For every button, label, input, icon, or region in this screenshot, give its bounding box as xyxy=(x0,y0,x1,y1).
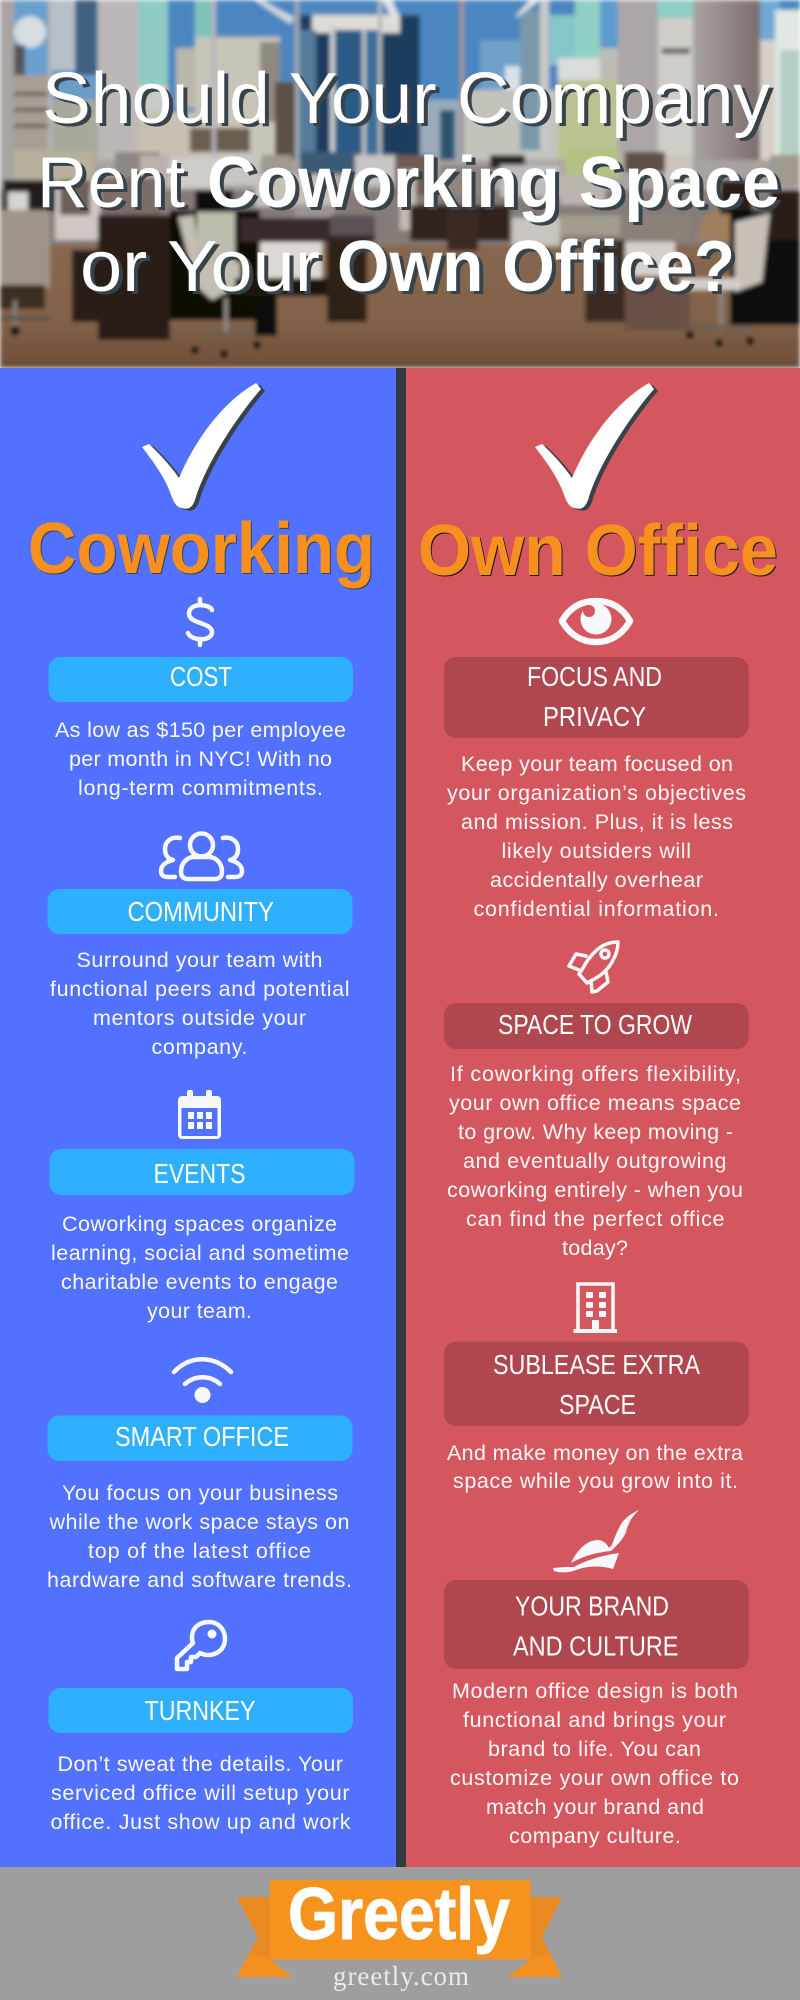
card: space to grow xyxy=(444,1003,748,1260)
text: brand description: Modern office design is both xyxy=(452,1679,738,1703)
icon: feathered hat xyxy=(553,1510,639,1572)
text: cost description: As low as $150 per employee xyxy=(55,718,346,742)
title: Rent xyxy=(37,143,185,223)
card: events xyxy=(50,1149,354,1323)
text: space to grow description xyxy=(447,1062,743,1260)
text: events description: learning, social and sometime xyxy=(51,1241,349,1265)
heading: Own Office: Own Office xyxy=(418,511,778,591)
pill: turnkey: TURNKEY xyxy=(144,1695,256,1726)
text: space to grow description: your own office means space xyxy=(449,1091,741,1115)
icon: eye xyxy=(562,601,630,642)
text: space to grow description: and eventually outgrowing xyxy=(463,1149,726,1173)
icon: dollar sign xyxy=(188,599,212,645)
pill: community: COMMUNITY xyxy=(128,896,274,927)
text: brand description: customize your own office to xyxy=(450,1766,739,1790)
text: space to grow description: today? xyxy=(562,1236,628,1260)
text: space to grow description: coworking entirely - when you xyxy=(447,1178,743,1202)
pill: events xyxy=(50,1149,354,1195)
icon: community people xyxy=(161,834,242,879)
text: community description: mentors outside your xyxy=(93,1006,306,1030)
text: turnkey description: office. Just show up and work xyxy=(50,1810,351,1834)
icon: wifi xyxy=(174,1359,231,1403)
text: brand description: match your brand and xyxy=(486,1795,704,1819)
text: sublease description xyxy=(447,1441,743,1493)
pill: focus and privacy: FOCUS AND xyxy=(527,661,662,692)
icon: key xyxy=(177,1622,225,1669)
text: community description xyxy=(50,948,350,1059)
card: cost xyxy=(48,657,353,800)
text: focus description: confidential information. xyxy=(474,897,719,921)
pill: space to grow xyxy=(444,1003,748,1049)
text: smart office description: top of the latest office xyxy=(88,1539,311,1563)
pill: focus and privacy: PRIVACY xyxy=(543,701,646,732)
pill: your brand: YOUR BRAND xyxy=(515,1590,669,1622)
text: focus description: accidentally overhear xyxy=(490,868,703,892)
text: space to grow description: can find the perfect office xyxy=(466,1207,724,1231)
text: turnkey description: serviced office will setup your xyxy=(51,1781,350,1805)
pill: cost: COST xyxy=(170,661,232,692)
icon: office building xyxy=(574,1284,617,1333)
title: Own Office? xyxy=(337,227,735,307)
header photo: blurred open-plan office xyxy=(0,0,800,368)
text: brand description: functional and brings your xyxy=(463,1708,726,1732)
panel: coworking xyxy=(0,368,396,1867)
icon: checkmark xyxy=(535,383,658,511)
pill: sublease xyxy=(444,1342,748,1426)
text: events description: your team. xyxy=(147,1299,252,1323)
text: brand description: company culture. xyxy=(509,1824,681,1848)
text: community description: Surround your team with xyxy=(76,948,322,972)
pill: focus and privacy xyxy=(444,657,748,738)
skyline left xyxy=(14,0,48,80)
pill: sublease: SPACE xyxy=(559,1389,636,1420)
text: smart office description: while the work space stays on xyxy=(48,1510,350,1534)
footer xyxy=(0,1867,800,2000)
pill: smart office xyxy=(48,1416,352,1461)
pill: space to grow: SPACE TO GROW xyxy=(498,1009,692,1040)
text: community description: company. xyxy=(152,1035,248,1059)
text: focus description xyxy=(447,752,746,921)
icon: checkmark xyxy=(142,383,265,511)
title: Coworking Space xyxy=(207,143,780,223)
pill: turnkey xyxy=(48,1688,353,1733)
text: smart office description: hardware and software trends. xyxy=(47,1568,352,1592)
text: events description: charitable events to engage xyxy=(61,1270,338,1294)
columns and mullions xyxy=(0,0,14,190)
card: turnkey xyxy=(48,1688,353,1834)
text: sublease description: And make money on the extra xyxy=(447,1441,743,1465)
text: space to grow description: to grow. Why keep moving - xyxy=(458,1120,733,1144)
text: cost description: per month in NYC! With no xyxy=(69,747,332,771)
desks left xyxy=(0,210,50,288)
skyline middle and right xyxy=(480,40,520,100)
pill: events: EVENTS xyxy=(154,1158,246,1189)
text: focus description: and mission. Plus, it is less xyxy=(461,810,733,834)
title xyxy=(37,59,780,307)
panel: own office xyxy=(406,368,800,1867)
text: community description: functional peers and potential xyxy=(50,977,350,1001)
card: community xyxy=(48,889,352,1059)
title: or Your xyxy=(80,227,320,307)
text: cost description xyxy=(55,718,346,800)
floor xyxy=(0,245,800,368)
pill: sublease: SUBLEASE EXTRA xyxy=(493,1349,700,1380)
divider xyxy=(396,368,406,1867)
card: sublease extra space xyxy=(444,1342,748,1493)
text: focus description: your organization’s objectives xyxy=(447,781,746,805)
text: focus description: Keep your team focused on xyxy=(461,752,733,776)
text: turnkey description xyxy=(50,1752,351,1834)
card: your brand and culture xyxy=(444,1580,748,1848)
pill: cost xyxy=(48,657,353,702)
text: smart office description: You focus on your business xyxy=(62,1481,338,1505)
text: events description: Coworking spaces organize xyxy=(62,1212,337,1236)
pill: your brand xyxy=(444,1580,748,1669)
text: smart office description xyxy=(47,1481,352,1592)
pill: community xyxy=(48,889,352,934)
title: Should Your Company xyxy=(42,59,770,139)
text: brand description xyxy=(450,1679,739,1848)
pill: your brand: AND CULTURE xyxy=(513,1630,678,1662)
text: website: greetly.com xyxy=(333,1961,469,1991)
text: events description xyxy=(51,1212,349,1323)
text: turnkey description: Don’t sweat the details. Your xyxy=(58,1752,343,1776)
logo: Greetly ribbon: Greetly xyxy=(288,1874,510,1955)
heading: Coworking: Coworking xyxy=(28,509,375,589)
text: brand description: brand to life. You can xyxy=(488,1737,701,1761)
office band xyxy=(54,158,800,195)
text: cost description: long-term commitments. xyxy=(78,776,323,800)
icon: calendar xyxy=(178,1090,221,1139)
card: focus and privacy xyxy=(444,657,748,921)
text: focus description: likely outsiders will xyxy=(502,839,691,863)
text: sublease description: space while you grow into it. xyxy=(453,1469,738,1493)
text: space to grow description: If coworking offers flexibility, xyxy=(450,1062,741,1086)
logo: Greetly ribbon xyxy=(237,1874,562,1977)
tower xyxy=(300,15,420,170)
card: smart office xyxy=(47,1416,352,1592)
pill: smart office: SMART OFFICE xyxy=(115,1421,289,1452)
desks right xyxy=(400,170,416,230)
icon: rocket xyxy=(569,942,618,992)
